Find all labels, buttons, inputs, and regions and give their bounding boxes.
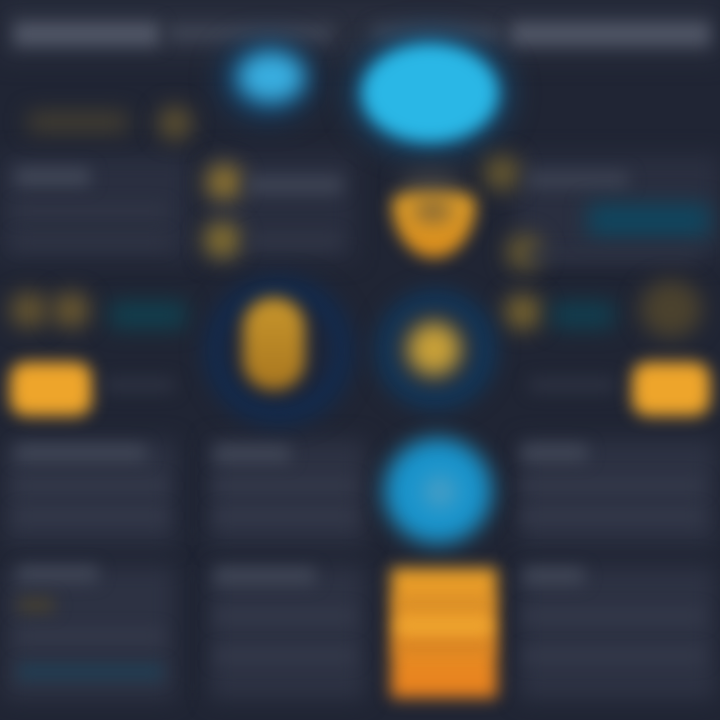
icon: right gold circle (640, 280, 702, 338)
teal label left (110, 302, 186, 328)
button: left orange (10, 362, 92, 416)
text: beside right button (530, 378, 615, 392)
button: right orange (632, 362, 710, 416)
text: beside left button (104, 378, 174, 392)
teal label right (552, 302, 614, 328)
